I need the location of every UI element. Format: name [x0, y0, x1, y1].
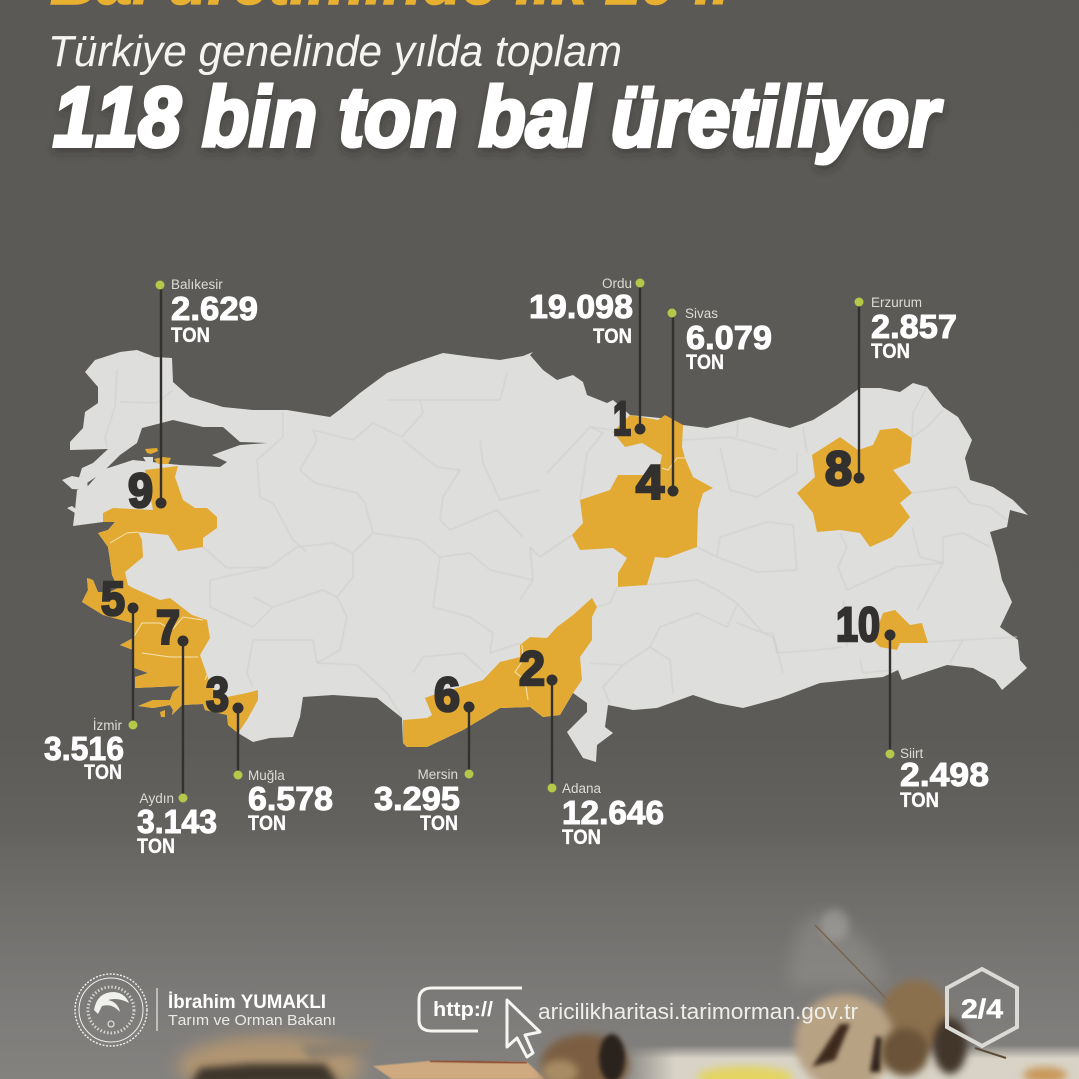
callout: Aydın: 3.143 [137, 803, 217, 840]
callout: Mersin: 3.295 [374, 780, 460, 817]
map: Siirt highlighted [873, 610, 928, 650]
footer: minister name: Tarım ve Orman Bakanı [168, 1013, 336, 1029]
callout: Sivas [668, 306, 772, 496]
callout: İzmir [44, 602, 138, 784]
callout: İzmir: TON [84, 761, 122, 784]
footer: website url: aricilikharitasi.tarimorman.gov.tr [538, 999, 858, 1024]
footer: minister name [157, 988, 336, 1031]
heading: subtitle: Türkiye genelinde yılda toplam [48, 27, 622, 76]
callout: Erzurum [854, 295, 957, 484]
rank numbers on the map: 10 [836, 599, 880, 652]
map: base land [70, 350, 1028, 762]
callout: Sivas: 6.079 [686, 319, 772, 356]
callout: Ordu: TON [593, 325, 632, 348]
callout: Aydın: TON [137, 835, 175, 858]
callout: Ordu: 19.098 [529, 288, 633, 325]
callout: Balıkesir: 2.629 [171, 290, 258, 327]
icon: http box and cursor [419, 988, 540, 1057]
map: Aegean islands [62, 457, 153, 513]
map: Erzurum highlighted [797, 428, 912, 547]
callout: Muğla [232, 702, 333, 835]
callout: Siirt: Siirt [900, 746, 923, 761]
rank numbers on the map: 2 [519, 643, 545, 696]
rank numbers on the map: 9 [128, 465, 153, 518]
rank numbers on the map: 5 [101, 573, 125, 626]
rank numbers on the map: 4 [636, 457, 664, 510]
callout: Adana: TON [562, 826, 601, 849]
callout: Mersin [374, 702, 474, 835]
rank numbers on the map: 6 [434, 669, 460, 722]
callout: Sivas: TON [686, 351, 724, 374]
callout: Ordu [529, 276, 646, 434]
callout: Adana: Adana [562, 781, 602, 796]
callout: Mersin: TON [420, 812, 458, 835]
map: Ordu and Sivas highlighted [572, 415, 713, 587]
callout: Siirt: TON [900, 789, 939, 812]
callout: Erzurum: 2.857 [871, 308, 957, 345]
callout: Ordu: Ordu [602, 276, 632, 291]
callout: Sivas: Sivas [685, 306, 718, 321]
rank numbers on the map [101, 393, 880, 722]
map: Balıkesir, İzmir, Aydın, Muğla highlighted [82, 466, 258, 733]
rank numbers on the map: 3 [206, 669, 229, 722]
icon: http box and cursor: http:// [433, 999, 493, 1021]
callout: Mersin: Mersin [417, 767, 458, 782]
callout: İzmir: İzmir [93, 718, 122, 733]
page badge: hexagon 2/4 [947, 969, 1017, 1046]
photo: blurred bees along the bottom [178, 909, 1079, 1079]
map: Mersin and Adana highlighted [403, 598, 597, 747]
callout: Aydın [137, 636, 217, 858]
callout: İzmir: 3.516 [44, 730, 124, 767]
map: highlighted borders [110, 532, 207, 680]
callout: Balıkesir [156, 277, 258, 508]
rank numbers on the map: 7 [156, 602, 180, 655]
map: Balıkesir islands [145, 448, 171, 717]
callout: Muğla: TON [248, 812, 286, 835]
callout: Adana: 12.646 [562, 794, 664, 831]
icon: ministry emblem [75, 974, 147, 1046]
callout: Adana [546, 674, 664, 849]
page badge: hexagon 2/4: 2/4 [961, 994, 1003, 1024]
map of Turkey [62, 350, 1028, 762]
callout: Balıkesir: Balıkesir [171, 277, 223, 292]
callout: Balıkesir: TON [171, 324, 210, 347]
callout: Erzurum: Erzurum [871, 295, 922, 310]
callout: Aydın: Aydın [139, 791, 174, 806]
map: Mersin-Adana border [515, 645, 528, 700]
callout: Siirt: 2.498 [900, 756, 989, 793]
rank numbers on the map: 8 [825, 443, 852, 496]
callout: Muğla: 6.578 [248, 780, 333, 817]
map: Ordu-Sivas border [662, 458, 685, 470]
callout: Muğla: Muğla [248, 768, 285, 783]
footer: minister name: İbrahim YUMAKLI [168, 992, 326, 1013]
map: province borders [105, 370, 1017, 717]
rank numbers on the map: 1 [613, 393, 631, 446]
heading: main title: 118 bin ton bal üretiliyor [53, 70, 943, 164]
callout: Erzurum: TON [871, 340, 910, 363]
callout: Siirt [884, 630, 989, 812]
